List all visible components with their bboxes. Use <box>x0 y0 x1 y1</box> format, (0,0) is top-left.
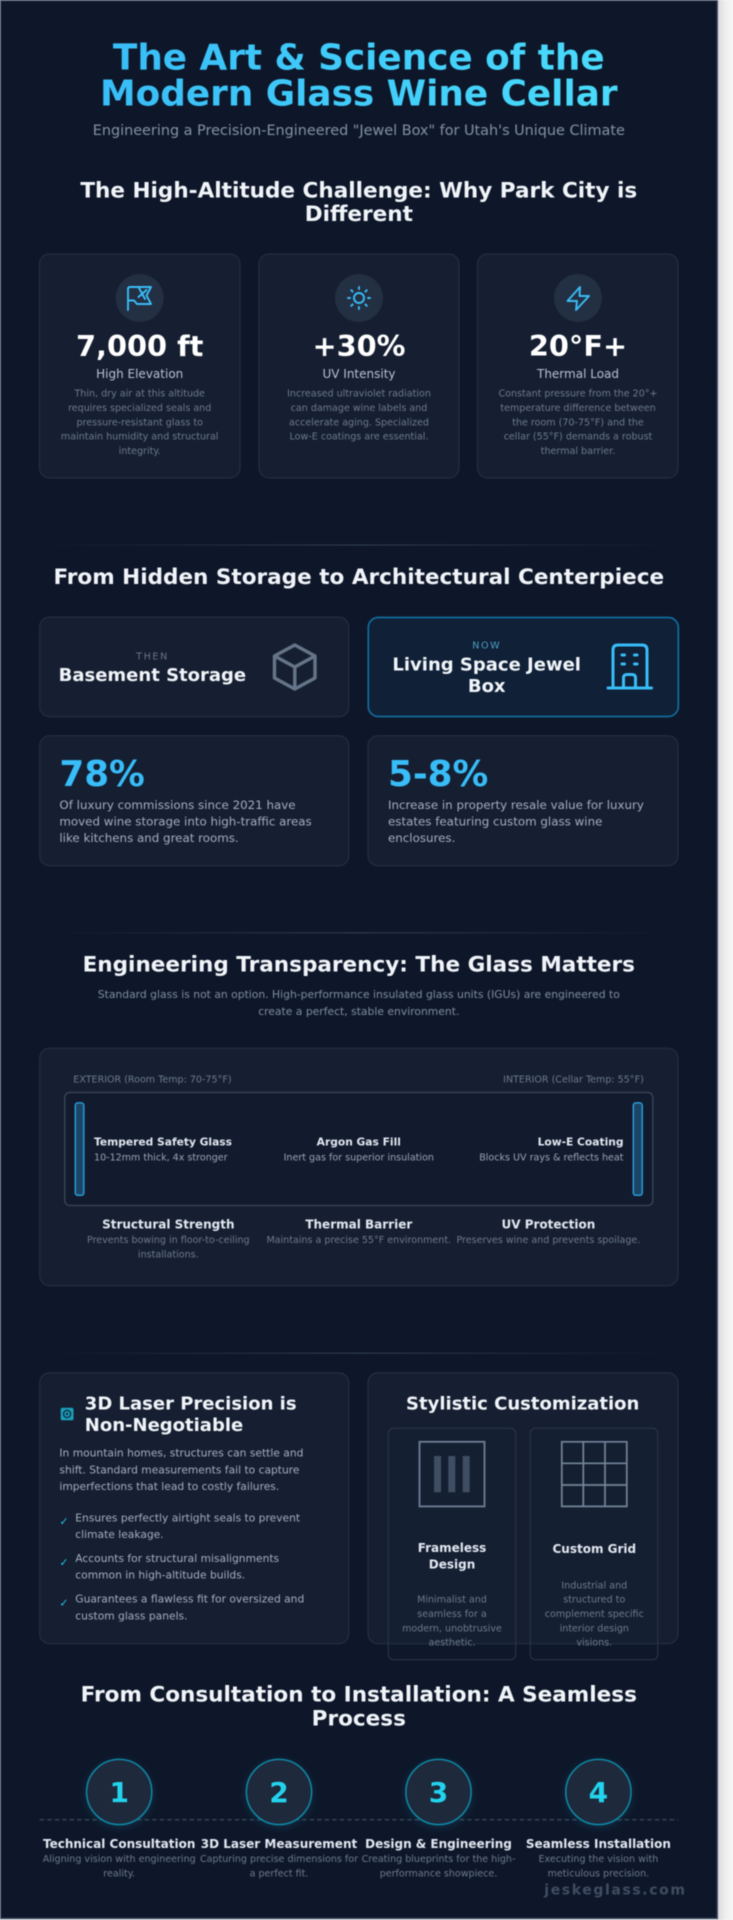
benefit: structural strength: Structural Strength <box>102 1218 234 1232</box>
step number 2 <box>246 1759 312 1825</box>
text: thermal description: Constant pressure from the 20°+ <box>498 389 658 400</box>
text: thermal description: temperature difference between <box>500 403 656 414</box>
text: technical consultation: Technical Consultation <box>43 1837 195 1851</box>
text: mountain homes: In mountain homes, structures can settle and <box>59 1447 303 1460</box>
text: uv description: Increased ultraviolet radiation <box>287 389 431 400</box>
subtitle: Engineering a Precision-Engineered "Jewel Box" for Utah's Unique Climate <box>93 123 625 139</box>
stat: 5-8%: 5-8% <box>388 754 488 795</box>
stat: 7,000 ft: 7,000 ft <box>76 329 204 363</box>
text: frameless design: Frameless <box>418 1541 486 1555</box>
benefit: thermal barrier: Maintains a precise 55°F environment. <box>266 1235 451 1246</box>
timeline connector <box>40 1819 678 1821</box>
text: living space jewel box: Living Space Jewel <box>392 654 581 676</box>
text: commissions: Of luxury commissions since 2021 have <box>59 798 296 812</box>
text: resale value: enclosures. <box>388 831 455 845</box>
text: elevation description: Thin, dry air at this altitude <box>73 389 205 400</box>
step 4 <box>526 1759 671 1879</box>
label: now: NOW <box>472 640 501 652</box>
label: interior: INTERIOR (Cellar Temp: 55°F) <box>503 1075 644 1086</box>
panel: high elevation <box>40 254 240 478</box>
text: living space jewel box: Box <box>468 676 506 697</box>
step number 4: 4 <box>589 1776 608 1809</box>
panel: stylistic customization <box>368 1373 678 1660</box>
text: design and engineering: Design & Engineering <box>365 1837 512 1851</box>
step number 4 <box>566 1759 631 1825</box>
text: glass intro: create a perfect, stable environment. <box>258 1005 459 1018</box>
icon: lightning bolt <box>554 274 602 322</box>
list item: flawless fit: custom glass panels. <box>75 1609 188 1622</box>
label: uv intensity: UV Intensity <box>322 367 396 381</box>
heading: engineering transparency: Engineering Transparency: The Glass Matters <box>83 952 635 978</box>
text: 3d laser measurement: a perfect fit. <box>250 1868 308 1879</box>
stat: +30%: +30% <box>312 329 406 363</box>
diagram: insulated glass unit <box>65 1092 653 1206</box>
list item: misalignments: common in high-altitude builds. <box>75 1569 245 1582</box>
stat: 20°F+: 20°F+ <box>529 329 627 363</box>
step 1 <box>43 1759 196 1879</box>
card: frameless design <box>388 1428 516 1660</box>
text: grid description: complement specific <box>545 1609 644 1620</box>
text: elevation description <box>61 389 218 457</box>
panel: glass diagram <box>40 1048 678 1286</box>
text: grid description: Industrial and <box>561 1580 627 1591</box>
benefit: structural strength <box>87 1218 250 1260</box>
text: tempered safety glass: Tempered Safety Glass <box>94 1136 232 1148</box>
text: frameless description: aesthetic. <box>428 1638 476 1649</box>
text: seamless installation: Seamless Installation <box>526 1837 671 1851</box>
heading: process: From Consultation to Installation: A Seamless <box>81 1682 637 1708</box>
list item: flawless fit: ✓ <box>60 1597 68 1610</box>
list item: misalignments: ✓ <box>60 1556 68 1569</box>
text: custom grid: Custom Grid <box>552 1542 636 1556</box>
text: seamless installation: Executing the vision with <box>538 1854 658 1865</box>
title <box>100 37 618 114</box>
panel: thermal load <box>478 254 678 478</box>
title: The Art & Science of the <box>113 37 605 78</box>
icon: box <box>274 645 315 689</box>
list item: misalignments: Accounts for structural misalignments <box>75 1552 280 1565</box>
glass pane: exterior <box>75 1103 84 1195</box>
benefit: uv protection <box>456 1218 640 1246</box>
text: resale value <box>388 798 644 845</box>
heading: process <box>81 1682 637 1732</box>
text: grid description <box>545 1580 644 1649</box>
text: low-e coating <box>479 1136 624 1164</box>
text: basement storage: Basement Storage <box>59 665 246 686</box>
list item: flawless fit <box>60 1593 304 1622</box>
text: uv description <box>287 389 431 443</box>
step 3 <box>362 1759 515 1879</box>
list item: airtight seals: Ensures perfectly airtight seals to prevent <box>75 1511 300 1524</box>
panel: 78% stat <box>40 736 349 866</box>
text: glass intro: Standard glass is not an option. High-performance insulated glass units (IGUs) are engineered to <box>98 988 620 1001</box>
icon: laser scan <box>61 1408 74 1420</box>
text: living space jewel box <box>392 654 581 697</box>
list item: flawless fit: Guarantees a flawless fit for oversized and <box>75 1593 304 1606</box>
text: design and engineering: performance showpiece. <box>380 1868 497 1879</box>
heading: stylistic customization: Stylistic Customization <box>406 1394 639 1414</box>
text: resale value: estates featuring custom glass wine <box>388 814 602 828</box>
text: seamless installation: meticulous precision. <box>548 1868 649 1879</box>
benefit: thermal barrier <box>266 1218 451 1246</box>
heading: 3d laser precision <box>85 1394 297 1436</box>
heading: 3d laser precision: Non-Negotiable <box>85 1415 243 1436</box>
text: seamless installation <box>526 1837 671 1879</box>
text: technical consultation <box>43 1837 196 1879</box>
text: 3d laser measurement: 3D Laser Measurement <box>201 1837 357 1851</box>
list item: airtight seals: ✓ <box>60 1515 68 1528</box>
panel: uv intensity <box>259 254 459 478</box>
icon: grid panel <box>562 1442 627 1506</box>
text: argon gas fill: Inert gas for superior insulation <box>284 1152 434 1164</box>
panel: then <box>40 617 349 717</box>
label: then: THEN <box>135 652 169 662</box>
step number 2: 2 <box>269 1776 289 1809</box>
benefit: uv protection: Preserves wine and prevents spoilage. <box>456 1235 640 1246</box>
text: uv description: Low-E coatings are essential. <box>290 432 428 443</box>
card: custom grid <box>530 1428 658 1660</box>
text: mountain homes: imperfections that lead to costly failures. <box>59 1480 279 1493</box>
text: glass intro <box>98 988 620 1018</box>
text: thermal description: cellar (55°F) demands a robust <box>504 432 653 443</box>
benefit: thermal barrier: Thermal Barrier <box>305 1218 412 1232</box>
stat: 78%: 78% <box>59 754 145 795</box>
step number 3 <box>406 1759 471 1825</box>
text: design and engineering <box>362 1837 515 1879</box>
text: tempered safety glass <box>94 1136 232 1164</box>
icon: building <box>608 645 652 688</box>
text: resale value: Increase in property resale value for luxury <box>388 798 644 812</box>
text: argon gas fill <box>284 1136 434 1164</box>
text: thermal description: the room (70-75°F) and the <box>512 417 644 428</box>
text: 3d laser measurement <box>200 1837 358 1879</box>
text: commissions: like kitchens and great rooms. <box>59 831 239 845</box>
text: design and engineering: Creating blueprints for the high- <box>362 1854 515 1865</box>
text: elevation description: maintain humidity and structural <box>61 432 218 443</box>
heading: high-altitude challenge <box>80 178 637 227</box>
label: high elevation: High Elevation <box>96 367 183 381</box>
text: thermal description <box>498 389 658 457</box>
text: technical consultation: reality. <box>103 1868 135 1879</box>
text: uv description: accelerate aging. Specialized <box>289 417 429 428</box>
label: thermal load: Thermal Load <box>536 367 619 381</box>
text: grid description: visions. <box>576 1638 612 1649</box>
label: exterior: EXTERIOR (Room Temp: 70-75°F) <box>73 1075 232 1086</box>
list item: airtight seals: climate leakage. <box>75 1528 164 1541</box>
panel: 3d laser precision <box>40 1373 349 1644</box>
text: grid description: structured to <box>563 1595 625 1606</box>
text: thermal description: thermal barrier. <box>541 446 615 457</box>
text: elevation description: requires specialized seals and <box>68 403 211 414</box>
title: Modern Glass Wine Cellar <box>100 73 618 114</box>
text: mountain homes: shift. Standard measurements fail to capture <box>59 1463 300 1476</box>
text: frameless design: Design <box>429 1558 475 1572</box>
list: laser benefits <box>60 1511 304 1622</box>
text: tempered safety glass: 10-12mm thick, 4x stronger <box>94 1152 228 1164</box>
text: mountain homes <box>59 1447 303 1493</box>
icon: sun <box>335 274 383 322</box>
text: frameless description: seamless for a <box>417 1609 487 1620</box>
watermark: jeskeglass.com <box>543 1882 687 1898</box>
step 2 <box>200 1759 358 1879</box>
benefit: uv protection: UV Protection <box>502 1218 595 1232</box>
icon: frameless panel <box>420 1442 484 1506</box>
text: elevation description: integrity. <box>119 446 161 457</box>
step number 1: 1 <box>109 1776 129 1809</box>
step number 3: 3 <box>429 1776 448 1809</box>
list item: airtight seals <box>60 1511 300 1541</box>
text: frameless description: Minimalist and <box>417 1595 487 1606</box>
text: grid description: interior design <box>560 1623 629 1634</box>
glass pane: interior <box>633 1103 642 1195</box>
text: frameless design <box>418 1541 486 1572</box>
text: 3d laser measurement: Capturing precise dimensions for <box>200 1854 358 1865</box>
text: low-e coating: Blocks UV rays & reflects heat <box>479 1152 624 1164</box>
text: commissions: moved wine storage into high-traffic areas <box>59 814 312 828</box>
benefit: structural strength: Prevents bowing in floor-to-ceiling <box>87 1235 250 1246</box>
text: technical consultation: Aligning vision with engineering <box>43 1854 196 1865</box>
heading: high-altitude challenge: Different <box>305 202 413 227</box>
heading: hidden storage: From Hidden Storage to Architectural Centerpiece <box>53 565 664 590</box>
heading: 3d laser precision: 3D Laser Precision is <box>85 1394 297 1414</box>
step number 1 <box>87 1759 152 1825</box>
text: argon gas fill: Argon Gas Fill <box>317 1136 401 1148</box>
heading: high-altitude challenge: The High-Altitude Challenge: Why Park City is <box>80 178 637 204</box>
text: uv description: can damage wine labels and <box>291 403 427 414</box>
text: elevation description: pressure-resistant glass to <box>76 417 203 428</box>
list item: misalignments <box>60 1552 280 1582</box>
heading: process: Process <box>312 1706 406 1732</box>
text: commissions <box>59 798 312 845</box>
text: frameless description: modern, unobtrusive <box>402 1623 502 1634</box>
benefit: structural strength: installations. <box>138 1249 199 1260</box>
panel: now <box>368 618 678 716</box>
panel: 5-8% stat <box>368 736 678 866</box>
text: frameless description <box>402 1595 502 1649</box>
text: low-e coating: Low-E Coating <box>538 1136 624 1148</box>
icon: flag <box>116 274 164 322</box>
